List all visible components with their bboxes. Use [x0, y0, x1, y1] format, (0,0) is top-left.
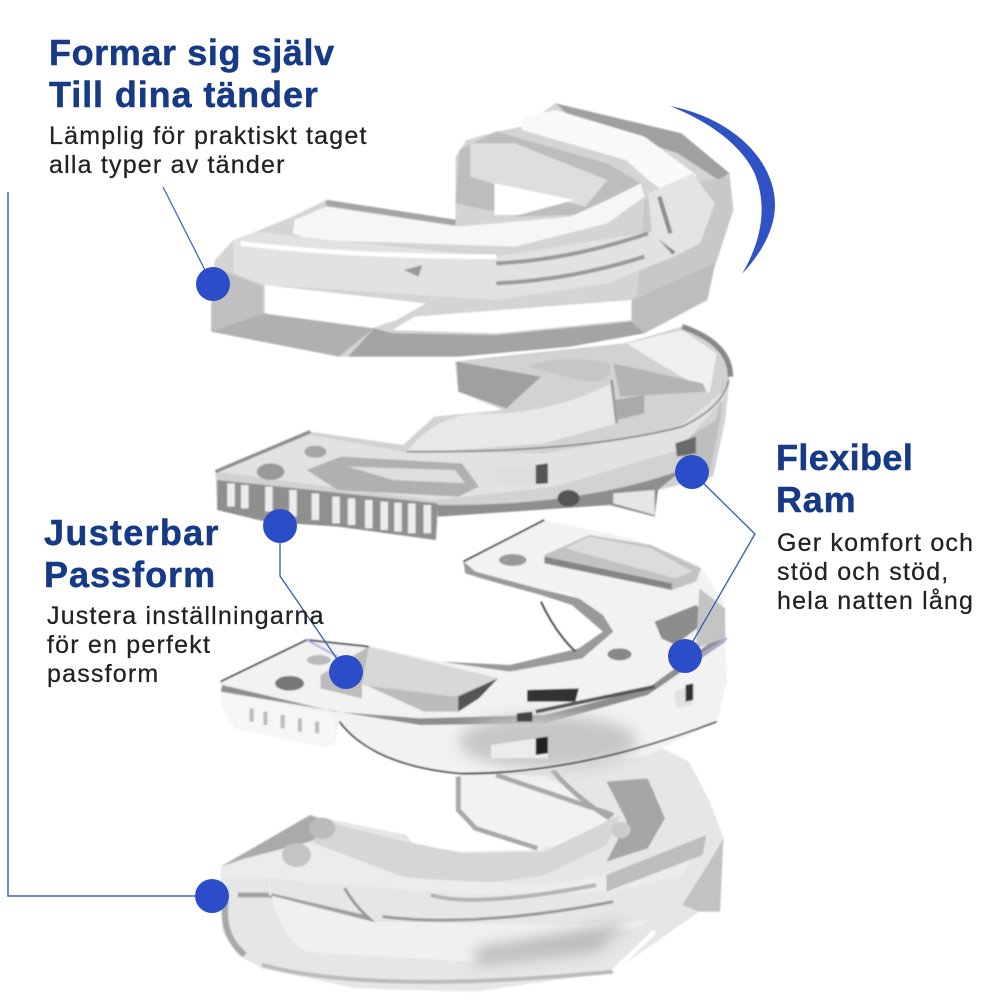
- text: left: för en perfekt: [47, 631, 211, 659]
- heading: right: Flexibel: [776, 437, 913, 478]
- second frame layer: [215, 327, 730, 540]
- text: right: hela natten lång: [777, 587, 974, 615]
- text: left: [47, 602, 325, 688]
- text: right: stöd och stöd,: [777, 558, 949, 586]
- callout line: left: [280, 526, 346, 672]
- callout line: bottom bracket: [8, 192, 212, 896]
- bottom tray layer: [221, 742, 723, 992]
- heading: right: [776, 437, 913, 520]
- blue arc arrow: [670, 106, 775, 274]
- text: top: [49, 122, 368, 179]
- third frame layer: [221, 520, 727, 773]
- text: right: [777, 529, 974, 615]
- heading: top: Formar sig själv: [49, 32, 335, 73]
- text: top: Lämplig för praktiskt taget: [49, 122, 368, 150]
- heading: right: Ram: [776, 479, 856, 520]
- text: left: Justera inställningarna: [47, 602, 325, 630]
- heading: left: [44, 512, 220, 595]
- callout line: right: [685, 472, 755, 655]
- heading: top: Till dina tänder: [49, 74, 319, 115]
- top tray layer: [211, 103, 733, 357]
- heading: left: Justerbar: [44, 512, 220, 553]
- text: left: passform: [47, 660, 159, 688]
- heading: top: [49, 32, 335, 115]
- callout line: top: [163, 187, 212, 284]
- text: right: Ger komfort och: [777, 529, 974, 557]
- text: top: alla typer av tänder: [49, 151, 286, 179]
- marker dots: [195, 267, 709, 913]
- heading: left: Passform: [44, 554, 216, 595]
